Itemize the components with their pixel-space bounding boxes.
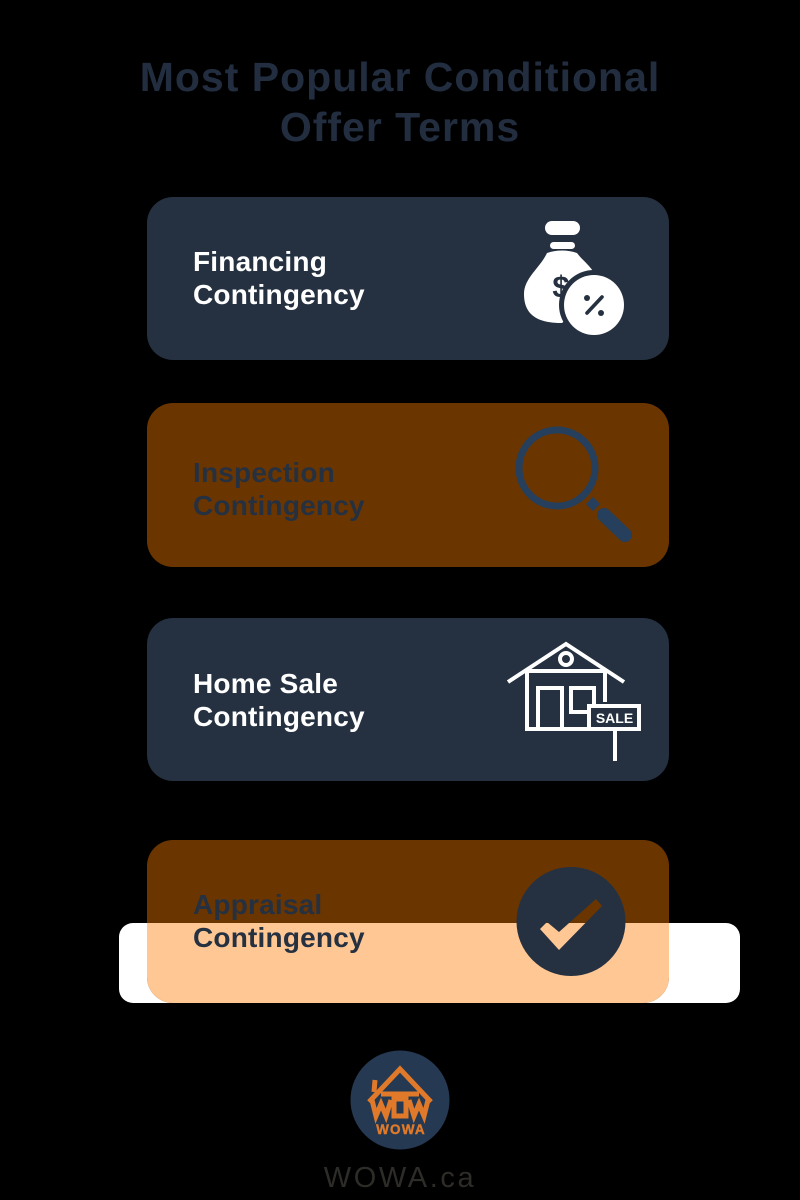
label: home sale contingency — [193, 668, 365, 732]
logo: WOWA badge — [350, 1050, 450, 1150]
icon: money bag with percent: $ — [552, 269, 570, 304]
title — [140, 54, 660, 150]
label: appraisal contingency: Appraisal — [193, 889, 322, 920]
panel: home sale contingency — [147, 618, 669, 781]
label: financing contingency — [193, 246, 365, 310]
panel: financing contingency — [147, 197, 669, 360]
label: inspection contingency: Inspection — [193, 457, 335, 488]
label: inspection contingency: Contingency — [193, 490, 365, 521]
icon: magnifying glass — [516, 426, 632, 542]
label: home sale contingency: Home Sale — [193, 668, 338, 699]
title: Offer Terms — [280, 104, 520, 150]
title: Most Popular Conditional — [140, 54, 660, 100]
label: appraisal contingency — [193, 889, 365, 953]
label: home sale contingency: Contingency — [193, 701, 365, 732]
icon: check mark badge — [516, 867, 626, 976]
white bar — [119, 923, 740, 1003]
label: appraisal contingency: Contingency — [193, 922, 365, 953]
icon: house with sale sign: SALE — [596, 710, 633, 726]
label: inspection contingency — [193, 457, 365, 521]
light lower section — [147, 923, 669, 1003]
panel: inspection contingency — [147, 403, 669, 567]
footer text: WOWA.ca: WOWA.ca — [324, 1162, 476, 1194]
icon: house with sale sign — [507, 642, 641, 761]
label: financing contingency: Contingency — [193, 279, 365, 310]
label: financing contingency: Financing — [193, 246, 327, 277]
panel: appraisal contingency — [147, 840, 669, 1003]
logo: WOWA badge: WOWA — [376, 1122, 426, 1137]
icon: money bag with percent — [524, 221, 624, 335]
